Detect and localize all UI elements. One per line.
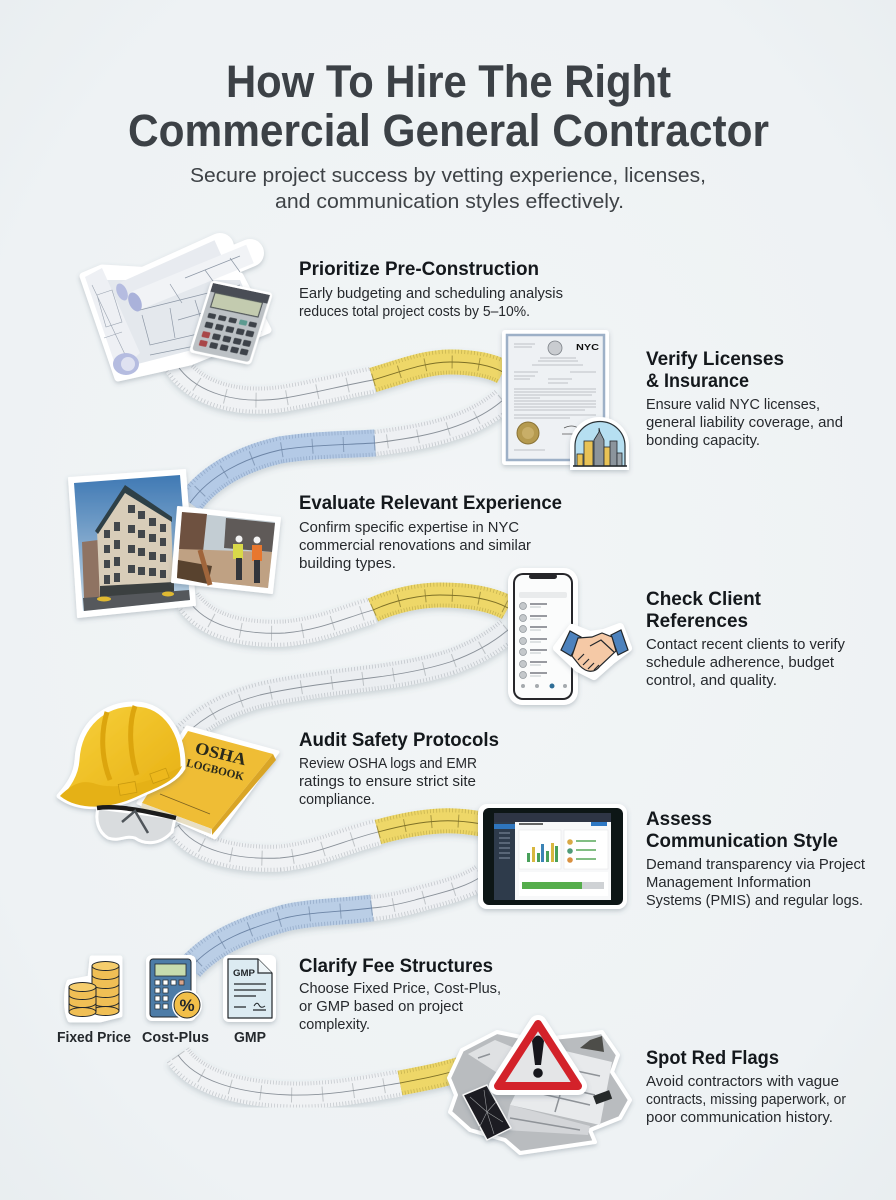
city skyline badge <box>570 417 629 470</box>
heading: audit safety protocols: Audit Safety Protocols <box>299 729 499 751</box>
heading: assess communication style <box>646 808 838 852</box>
blueprint sticker <box>83 247 268 378</box>
title <box>128 56 769 156</box>
osha logbook: LOGBOOK <box>185 757 245 783</box>
icon group: fee structures <box>57 955 276 1046</box>
text: check client references: control, and quality. <box>646 673 777 689</box>
warning triangle <box>498 1024 578 1086</box>
icon: cost-plus calculator <box>146 955 202 1021</box>
text: verify licenses: general liability coverage, and <box>646 415 843 431</box>
text: clarify fee structures: complexity. <box>299 1017 370 1033</box>
text: clarify fee structures: or GMP based on project <box>299 999 463 1015</box>
icon: blueprints and calculator <box>83 247 273 378</box>
text: spot red flags: Avoid contractors with vague <box>646 1074 839 1090</box>
safety goggles <box>97 807 176 843</box>
icon: license certificate <box>502 330 629 470</box>
title: Commercial General Contractor <box>128 105 769 156</box>
heading: verify licenses <box>646 348 784 392</box>
text: audit safety protocols: Review OSHA logs and EMR <box>299 756 477 772</box>
tape section 1 <box>175 362 503 503</box>
heading: verify licenses: & Insurance <box>646 370 749 392</box>
text: spot red flags: contracts, missing paperwork, or <box>646 1092 846 1108</box>
heading: check client references: References <box>646 610 748 632</box>
hard hat <box>59 704 183 807</box>
tape section 2 <box>185 595 508 735</box>
text: audit safety protocols: compliance. <box>299 792 375 808</box>
heading: clarify fee structures: Clarify Fee Structures <box>299 955 493 977</box>
text: audit safety protocols: ratings to ensure strict site <box>299 774 476 790</box>
osha logbook: OSHA <box>193 738 249 769</box>
subtitle <box>190 164 706 213</box>
icon: warning sign over papers <box>449 1024 630 1153</box>
phone <box>508 568 578 705</box>
icon: cost-plus calculator: % <box>179 996 195 1015</box>
calculator <box>189 280 273 365</box>
text: assess communication style <box>646 857 865 909</box>
icon: gmp document <box>223 955 276 1022</box>
text: spot red flags <box>646 1074 846 1126</box>
text: assess communication style: Demand transparency via Project <box>646 857 865 873</box>
text: prioritize pre-construction: Early budgeting and scheduling analysis <box>299 286 563 302</box>
heading: verify licenses: Verify Licenses <box>646 348 784 370</box>
heading: check client references <box>646 588 761 632</box>
tape section 3 <box>178 821 482 968</box>
subtitle: Secure project success by vetting experience, licenses, <box>190 164 706 187</box>
text: check client references <box>646 637 846 689</box>
title: How To Hire The Right <box>226 56 671 107</box>
certificate sheet: NYC <box>576 342 599 352</box>
heading: spot red flags: Spot Red Flags <box>646 1047 779 1069</box>
paper pile <box>449 1032 630 1153</box>
icon: phone with contacts and handshake <box>508 568 628 705</box>
text: assess communication style: Management Information <box>646 875 811 891</box>
text: evaluate relevant experience: commercial renovations and similar <box>299 538 531 554</box>
text: check client references: schedule adherence, budget <box>646 655 834 671</box>
text: clarify fee structures: Choose Fixed Price, Cost-Plus, <box>299 981 501 997</box>
text: spot red flags: poor communication history. <box>646 1110 833 1126</box>
cracked phone <box>463 1085 511 1140</box>
heading: assess communication style: Assess <box>646 808 712 830</box>
text: audit safety protocols <box>299 756 477 808</box>
text: clarify fee structures <box>299 981 501 1033</box>
building photo <box>69 470 195 617</box>
handshake <box>557 627 628 676</box>
icon: fixed price coins <box>66 958 120 1020</box>
construction site photo <box>172 507 280 593</box>
text: prioritize pre-construction <box>299 286 563 320</box>
text: verify licenses: Ensure valid NYC licenses, <box>646 397 820 413</box>
text: evaluate relevant experience: Confirm specific expertise in NYC <box>299 520 519 536</box>
icon: building and site photos <box>69 470 280 617</box>
label: cost-plus: Cost-Plus <box>142 1030 209 1046</box>
icon: hard hat, logbook and goggles <box>59 704 278 843</box>
subtitle: and communication styles effectively. <box>275 190 624 213</box>
text: check client references: Contact recent clients to verify <box>646 637 846 653</box>
text: assess communication style: Systems (PMIS) and regular logs. <box>646 893 863 909</box>
heading: evaluate relevant experience: Evaluate Relevant Experience <box>299 492 562 514</box>
text: verify licenses <box>646 397 843 449</box>
text: evaluate relevant experience <box>299 520 531 572</box>
heading: prioritize pre-construction: Prioritize Pre-Construction <box>299 258 539 280</box>
icon: tablet dashboard <box>478 804 627 909</box>
measuring tape path <box>175 362 508 1095</box>
heading: check client references: Check Client <box>646 588 761 610</box>
tape section 4 <box>178 1055 470 1095</box>
heading: assess communication style: Communication Style <box>646 830 838 852</box>
label: fixed price: Fixed Price <box>57 1030 131 1046</box>
icon: gmp document: GMP <box>233 968 256 979</box>
label: gmp: GMP <box>234 1030 266 1046</box>
osha logbook <box>138 727 278 838</box>
text: verify licenses: bonding capacity. <box>646 433 760 449</box>
text: prioritize pre-construction: reduces total project costs by 5–10%. <box>299 304 530 320</box>
text: evaluate relevant experience: building types. <box>299 556 396 572</box>
